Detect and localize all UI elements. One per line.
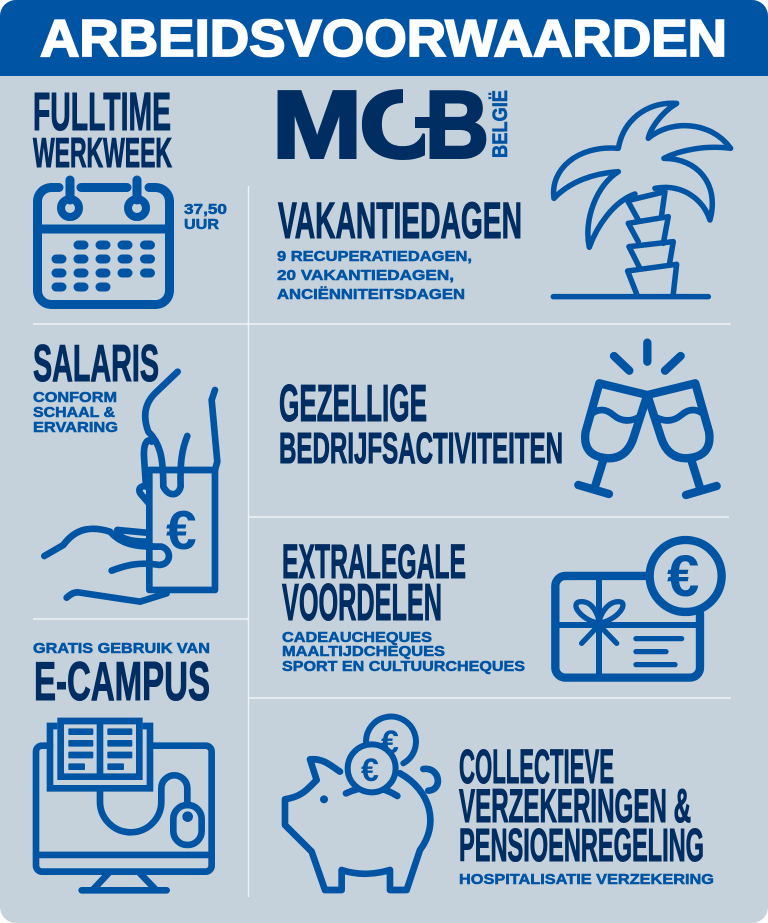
icon: hands with banknote xyxy=(44,372,217,602)
header band xyxy=(0,0,768,76)
heading: fulltime werkweek: WERKWEEK xyxy=(33,129,172,176)
logo: MCB België: C xyxy=(359,72,441,178)
panel: collectieve verzekeringen text: HOSPITALISATIE VERZEKERING xyxy=(459,872,714,888)
logo: MCB België: M xyxy=(272,72,362,178)
icon: champagne glasses xyxy=(578,343,717,495)
heading: salaris: SCHAAL & xyxy=(33,405,116,421)
panel: vakantiedagen text: ANCIËNNITEITSDAGEN xyxy=(277,286,465,303)
text: 37,50 uur: 37,50 xyxy=(184,202,227,218)
icon: palm tree xyxy=(553,103,731,297)
heading: salaris xyxy=(33,335,159,436)
panel: extralegale voordelen text: CADEAUCHEQUES xyxy=(282,630,432,646)
logo: MCB België xyxy=(272,72,512,178)
heading: salaris: ERVARING xyxy=(33,420,118,436)
panel: extralegale voordelen text xyxy=(282,536,525,675)
panel: gezellige bedrijfsactiviteiten text: GEZELLIGE xyxy=(279,375,427,433)
text: 37,50 uur xyxy=(184,202,227,233)
panel: extralegale voordelen text: VOORDELEN xyxy=(282,574,442,632)
panel: vakantiedagen text xyxy=(277,192,522,303)
icon: calendar xyxy=(37,180,170,304)
logo: MCB België: B xyxy=(425,72,489,178)
heading: salaris: CONFORM xyxy=(33,390,117,406)
panel: gezellige bedrijfsactiviteiten text xyxy=(279,375,563,473)
icon: gift voucher xyxy=(555,540,722,678)
icon: euro on back coin: € xyxy=(381,724,399,760)
text: 37,50 uur: UUR xyxy=(184,217,220,233)
panel: vakantiedagen text: VAKANTIEDAGEN xyxy=(278,192,522,249)
heading: fulltime werkweek: FULLTIME xyxy=(33,82,171,142)
panel: extralegale voordelen text: SPORT EN CULTUURCHEQUES xyxy=(282,659,525,675)
panel: extralegale voordelen text: EXTRALEGALE xyxy=(282,536,466,589)
heading: e-campus xyxy=(33,641,210,712)
panel: vakantiedagen text: 20 VAKANTIEDAGEN, xyxy=(277,268,454,284)
panel: collectieve verzekeringen text xyxy=(459,741,714,888)
icon: piggy bank xyxy=(285,717,438,890)
icon: computer with book and mouse xyxy=(36,721,212,890)
heading: salaris: SALARIS xyxy=(33,335,159,393)
icon: euro on banknote: € xyxy=(166,499,197,561)
icon: euro in circle: € xyxy=(667,544,699,609)
panel: extralegale voordelen text: MAALTIJDCHEQUES xyxy=(282,644,445,660)
panel: vakantiedagen text: 9 RECUPERATIEDAGEN, xyxy=(277,249,472,265)
heading: fulltime werkweek xyxy=(33,82,172,176)
icon: euro on front coin: € xyxy=(361,752,379,788)
heading: e-campus: E-CAMPUS xyxy=(34,650,210,712)
heading: e-campus: GRATIS GEBRUIK VAN xyxy=(33,641,210,657)
logo: MCB België: BELGIË xyxy=(489,90,512,158)
title: ARBEIDSVOORWAARDEN xyxy=(40,10,727,68)
